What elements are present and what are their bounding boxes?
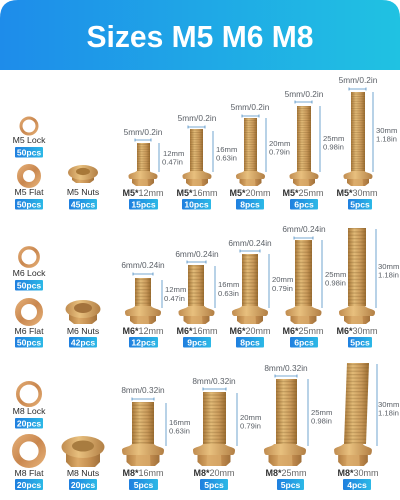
M6 30mm bolt: M6*30mm bbox=[336, 326, 378, 336]
M8 25mm bolt bbox=[264, 363, 332, 490]
M8 16mm bolt: 8mm/0.32in bbox=[121, 385, 165, 395]
M6 20mm bolt: 20mm bbox=[272, 275, 293, 284]
M6 25mm bolt bbox=[282, 224, 346, 348]
M6 30mm bolt: 1.18in bbox=[378, 270, 399, 280]
M5 12mm bolt: 0.47in bbox=[162, 158, 183, 166]
M6 lock washer: M6 Lock bbox=[13, 268, 46, 278]
M5 lock washer: M5 Lock bbox=[13, 135, 46, 145]
M5 30mm bolt bbox=[336, 75, 397, 210]
M8 25mm bolt: 0.98in bbox=[311, 416, 332, 426]
M6 row: washers and nuts bbox=[13, 248, 100, 348]
M5 30mm bolt: 1.18in bbox=[376, 134, 397, 144]
M5 20mm bolt: M5*20mm bbox=[229, 188, 271, 198]
M8 nut: 20pcs bbox=[71, 480, 95, 490]
M6 lock washer: 50pcs bbox=[17, 280, 41, 290]
M5 30mm bolt: 5mm/0.2in bbox=[339, 75, 378, 85]
M6 25mm bolt: 25mm bbox=[325, 270, 346, 279]
M8 lock washer: 20pcs bbox=[17, 418, 41, 428]
M5 20mm bolt bbox=[229, 102, 290, 210]
M6 30mm bolt bbox=[336, 228, 399, 348]
M5 25mm bolt: 6pcs bbox=[294, 200, 314, 210]
M6 flat washer: M6 Flat bbox=[15, 326, 44, 336]
M6 nut: M6 Nuts bbox=[67, 326, 100, 336]
M6 20mm bolt: 6mm/0.24in bbox=[228, 238, 272, 248]
M6 16mm bolt: 0.63in bbox=[218, 289, 239, 298]
M6 30mm bolt: 5pcs bbox=[350, 338, 370, 348]
M6 25mm bolt: 6pcs bbox=[294, 338, 314, 348]
M6 20mm bolt: 8pcs bbox=[240, 338, 260, 348]
M8 30mm bolt: 1.18in bbox=[378, 408, 399, 418]
M5 16mm bolt: 10pcs bbox=[184, 200, 209, 210]
M8 20mm bolt bbox=[192, 376, 261, 490]
M5 25mm bolt: M5*25mm bbox=[282, 188, 324, 198]
M5 12mm bolt: 12mm bbox=[163, 149, 184, 158]
M6 nut bbox=[66, 300, 100, 348]
M8 20mm bolt: 8mm/0.32in bbox=[192, 376, 236, 386]
M5 25mm bolt bbox=[282, 89, 344, 210]
M8 30mm bolt bbox=[334, 363, 399, 490]
M6 16mm bolt: 6mm/0.24in bbox=[175, 249, 219, 259]
M6 25mm bolt: 6mm/0.24in bbox=[282, 224, 326, 234]
M5 16mm bolt: M5*16mm bbox=[176, 188, 218, 198]
M5 25mm bolt: 0.98in bbox=[323, 142, 344, 152]
M5 flat washer: M5 Flat bbox=[15, 187, 44, 197]
M8 25mm bolt: M8*25mm bbox=[265, 468, 307, 478]
M6 16mm bolt: 16mm bbox=[218, 280, 239, 289]
M8 nut: M8 Nuts bbox=[67, 468, 100, 478]
M5 flat washer bbox=[15, 167, 44, 210]
title: Sizes M5 M6 M8 bbox=[86, 20, 314, 54]
M5 25mm bolt: 5mm/0.2in bbox=[285, 89, 324, 99]
M5 30mm bolt: 30mm bbox=[376, 126, 397, 135]
M8 flat washer bbox=[15, 438, 44, 490]
M5 12mm bolt: 5mm/0.2in bbox=[124, 127, 163, 137]
M6 12mm bolt bbox=[121, 260, 186, 348]
M8 lock washer: M8 Lock bbox=[13, 406, 46, 416]
M8 nut bbox=[62, 436, 104, 490]
M5 nut: M5 Nuts bbox=[67, 187, 100, 197]
M6 20mm bolt: 0.79in bbox=[272, 284, 293, 293]
M8 16mm bolt: 5pcs bbox=[134, 480, 154, 490]
M5 nut: 45pcs bbox=[71, 200, 95, 210]
M5 flat washer: 50pcs bbox=[17, 200, 41, 210]
M8 20mm bolt: M8*20mm bbox=[193, 468, 235, 478]
M6 16mm bolt: 9pcs bbox=[187, 338, 207, 348]
M6 lock washer bbox=[13, 248, 46, 290]
M8 16mm bolt: 16mm bbox=[169, 418, 190, 427]
M8 25mm bolt: 25mm bbox=[311, 408, 332, 417]
M5 16mm bolt bbox=[176, 113, 237, 210]
M5 12mm bolt bbox=[122, 127, 184, 210]
M6 16mm bolt bbox=[175, 249, 239, 348]
M8 lock washer bbox=[13, 383, 46, 428]
M8 25mm bolt: 8mm/0.32in bbox=[264, 363, 308, 373]
M6 12mm bolt: 6mm/0.24in bbox=[121, 260, 165, 270]
M6 12mm bolt: 12mm bbox=[165, 285, 186, 294]
M5 30mm bolt: 5pcs bbox=[350, 200, 370, 210]
M8 16mm bolt bbox=[121, 385, 190, 490]
M8 flat washer: 20pcs bbox=[17, 480, 41, 490]
M6 30mm bolt: 30mm bbox=[378, 262, 399, 271]
M8 20mm bolt: 5pcs bbox=[204, 480, 224, 490]
M6 nut: 42pcs bbox=[71, 338, 95, 348]
M8 30mm bolt: 4pcs bbox=[347, 480, 367, 490]
M5 16mm bolt: 16mm bbox=[216, 145, 237, 154]
M5 12mm bolt: 15pcs bbox=[131, 200, 156, 210]
M8 16mm bolt: M8*16mm bbox=[122, 468, 164, 478]
M6 25mm bolt: M6*25mm bbox=[282, 326, 324, 336]
M6 20mm bolt: M6*20mm bbox=[229, 326, 271, 336]
M5 20mm bolt: 5mm/0.2in bbox=[231, 102, 270, 112]
M6 20mm bolt bbox=[228, 238, 293, 348]
M6 flat washer bbox=[15, 301, 44, 348]
M5 20mm bolt: 8pcs bbox=[240, 200, 260, 210]
M8 20mm bolt: 20mm bbox=[240, 413, 261, 422]
M8 20mm bolt: 0.79in bbox=[240, 422, 261, 430]
M5 12mm bolt: M5*12mm bbox=[122, 188, 164, 198]
M5 16mm bolt: 0.63in bbox=[216, 154, 237, 162]
M8 16mm bolt: 0.63in bbox=[169, 426, 190, 436]
M5 row: washers and nuts bbox=[13, 118, 100, 210]
M5 20mm bolt: 0.79in bbox=[269, 148, 290, 156]
M5 lock washer bbox=[13, 118, 46, 158]
M6 12mm bolt: 12pcs bbox=[131, 338, 156, 348]
M5 16mm bolt: 5mm/0.2in bbox=[178, 113, 217, 123]
M6 flat washer: 50pcs bbox=[17, 338, 41, 348]
M5 nut bbox=[67, 165, 100, 210]
header banner bbox=[0, 0, 400, 70]
M8 25mm bolt: 5pcs bbox=[281, 480, 301, 490]
M5 25mm bolt: 25mm bbox=[323, 134, 344, 143]
M6 25mm bolt: 0.98in bbox=[325, 278, 346, 288]
M6 16mm bolt: M6*16mm bbox=[176, 326, 218, 336]
M6 12mm bolt: 0.47in bbox=[164, 294, 185, 303]
M6 12mm bolt: M6*12mm bbox=[122, 326, 164, 336]
M5 30mm bolt: M5*30mm bbox=[336, 188, 378, 198]
M8 30mm bolt: 30mm bbox=[378, 400, 399, 409]
M8 flat washer: M8 Flat bbox=[15, 468, 44, 478]
M8 30mm bolt: M8*30mm bbox=[337, 468, 379, 478]
M8 row: washers and nuts bbox=[13, 383, 104, 490]
M5 20mm bolt: 20mm bbox=[269, 139, 290, 148]
M5 lock washer: 50pcs bbox=[17, 148, 41, 158]
